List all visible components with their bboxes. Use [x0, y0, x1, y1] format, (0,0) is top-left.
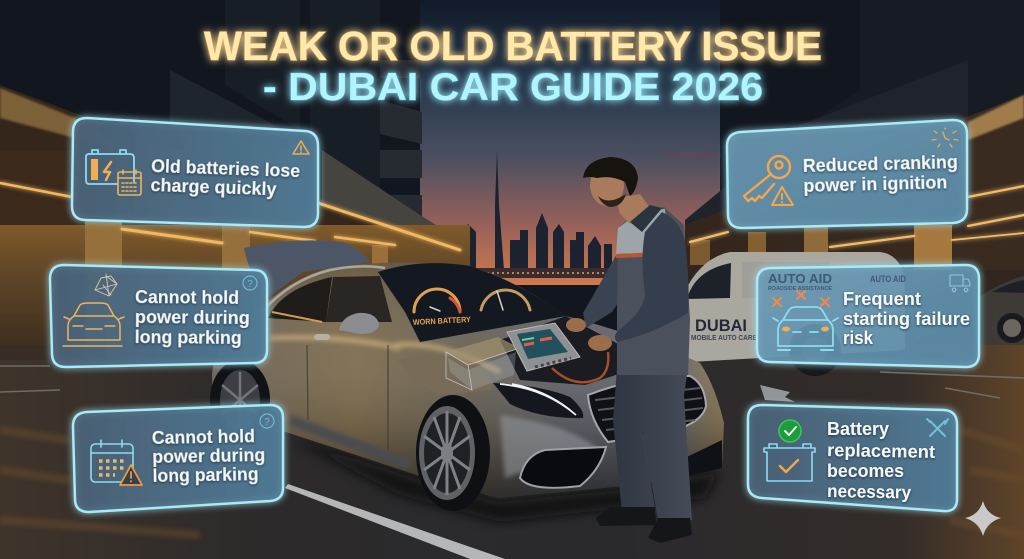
hair — [583, 157, 638, 196]
panel: cannot hold power, parked car — [50, 265, 267, 367]
collar and neck — [616, 194, 650, 224]
headlight — [493, 383, 583, 418]
icon: key with warning — [744, 156, 793, 205]
open boot lid — [244, 240, 370, 300]
beard — [598, 194, 626, 207]
side windows — [268, 277, 332, 322]
text: frequent starting: risk — [843, 328, 874, 348]
text: frequent starting — [843, 289, 970, 348]
text: old batteries: Old batteries lose — [151, 156, 300, 181]
van lettering through glass — [768, 271, 906, 292]
text: reduced cranking: power in ignition — [803, 172, 948, 196]
text: frequent starting: starting failure — [843, 309, 970, 329]
icon: battery with calendar — [86, 150, 141, 195]
parking line — [285, 484, 505, 559]
text: cannot hold power: long parking — [152, 464, 259, 486]
panel: reduced cranking power — [727, 120, 967, 228]
text: old batteries — [150, 156, 300, 200]
icon: question mark — [260, 414, 274, 428]
icon: clock burst — [932, 128, 958, 147]
right building — [800, 0, 1024, 170]
hologram battery — [446, 337, 520, 390]
parked car right — [975, 276, 1024, 345]
hood — [398, 356, 492, 395]
title line 2: - DUBAI CAR GUIDE 2026 — [263, 66, 763, 109]
door lines — [307, 345, 388, 450]
text: battery replacement: Battery — [827, 419, 889, 439]
icon: battery with check — [764, 420, 815, 481]
ground — [0, 345, 1024, 559]
text: frequent starting: Frequent — [843, 289, 921, 309]
panel: cannot hold power, calendar — [73, 405, 283, 512]
far arm — [583, 240, 640, 328]
skyline lights — [462, 272, 612, 274]
boots — [596, 507, 656, 526]
title line 1: WEAK OR OLD BATTERY ISSUE — [204, 23, 822, 69]
icon: question mark — [243, 276, 257, 290]
panel: frequent starting failure — [757, 265, 979, 367]
van lettering through glass: AUTO AID — [768, 271, 832, 286]
windshield — [378, 263, 566, 342]
text: cannot hold power: power during — [135, 307, 250, 328]
legs — [613, 368, 692, 520]
text: reduced cranking — [803, 152, 959, 196]
side mirror — [339, 313, 379, 334]
icon: tools — [927, 419, 948, 436]
text: cannot hold power — [152, 426, 266, 486]
left parking structure — [0, 85, 460, 270]
roof rail — [262, 266, 385, 312]
text: cannot hold power — [135, 287, 250, 348]
title — [204, 23, 822, 109]
ceiling light strips right — [690, 186, 1024, 247]
van — [683, 252, 905, 376]
near arm — [615, 212, 689, 342]
text: old batteries: charge quickly — [150, 175, 277, 199]
torso — [617, 207, 690, 375]
icon: question mark: ? — [264, 417, 270, 428]
dash gauges — [414, 289, 530, 312]
ground shadow — [286, 436, 720, 522]
grille — [588, 376, 706, 442]
diagnostic tablet — [507, 323, 580, 371]
body — [212, 262, 724, 498]
front wheel — [416, 395, 490, 511]
left building — [0, 0, 420, 250]
skyline with Burj Khalifa — [440, 150, 630, 278]
van lettering through glass: AUTO AID — [870, 274, 906, 284]
mechanic — [552, 157, 692, 543]
ceiling light strips left — [0, 183, 460, 250]
door handle — [314, 334, 330, 340]
text: cannot hold power: Cannot hold — [152, 426, 255, 448]
text: battery replacement — [827, 419, 935, 502]
cables — [552, 352, 608, 382]
lower intake — [520, 447, 606, 488]
icon: question mark: ? — [247, 279, 253, 290]
icon: car with cobweb — [63, 274, 124, 346]
van: MOBILE AUTO CARE — [691, 335, 757, 342]
rear wheel — [210, 360, 270, 440]
van lettering through glass: ROADSIDE ASSISTANCE — [768, 286, 832, 292]
car — [210, 240, 724, 522]
van lettering: DUBAI — [695, 316, 747, 335]
icon: calendar with warning — [91, 440, 142, 485]
icon: warning triangle — [293, 141, 309, 154]
windshield label: WORN BATTERY — [413, 315, 472, 327]
text: battery replacement: necessary — [827, 481, 911, 502]
body highlights — [270, 337, 500, 372]
panel: old batteries lose charge — [72, 118, 318, 227]
face — [590, 164, 624, 206]
panel: battery replacement — [748, 405, 957, 511]
icon: delivery van — [950, 275, 970, 292]
icon: car with failure crosses — [773, 291, 838, 350]
text: cannot hold power: long parking — [135, 327, 242, 348]
icon: sparkle watermark — [965, 501, 1001, 536]
text: cannot hold power: Cannot hold — [135, 287, 239, 308]
hands — [566, 318, 586, 332]
text: battery replacement: becomes — [827, 461, 904, 481]
engine bay — [500, 316, 625, 385]
text: cannot hold power: power during — [152, 445, 265, 467]
text: reduced cranking: Reduced cranking — [803, 152, 958, 176]
text: battery replacement: replacement — [827, 440, 935, 462]
